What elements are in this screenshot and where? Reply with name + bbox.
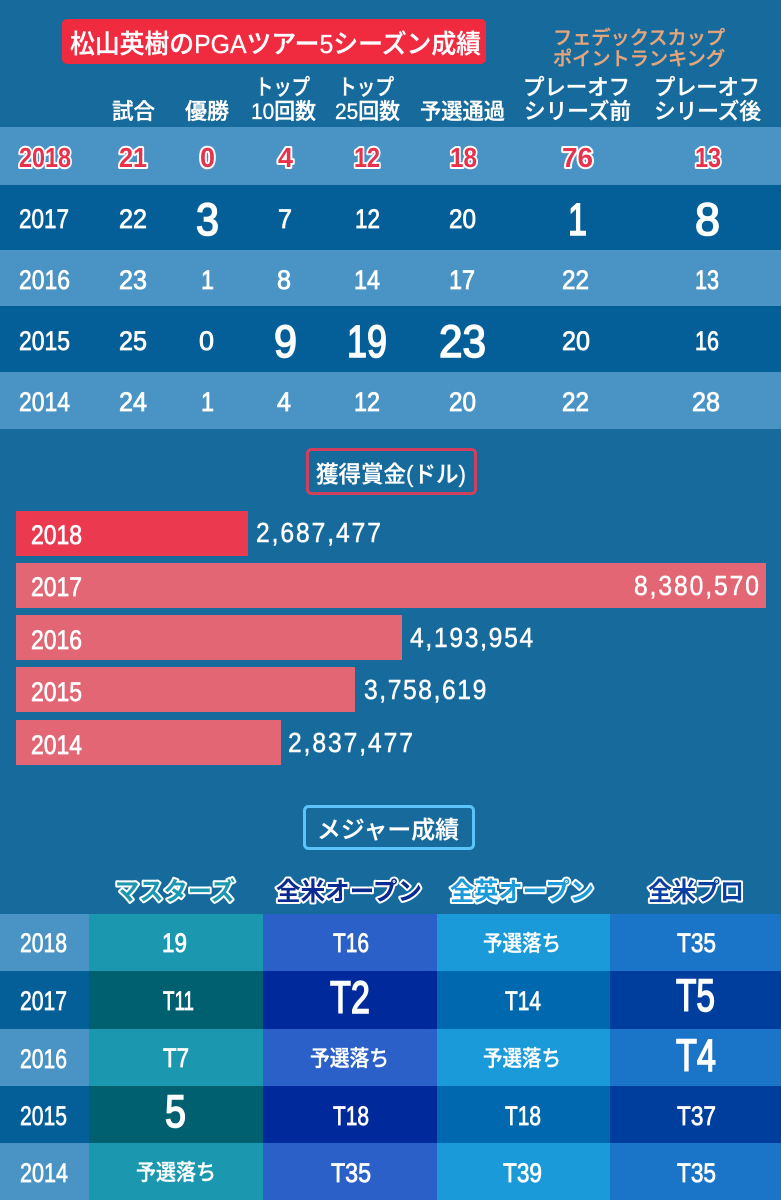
majors row 2014: 2014	[20, 1158, 68, 1188]
season table column headers: トップ	[338, 75, 394, 100]
season table column headers: 試合	[112, 99, 155, 124]
heading: prize money: 獲得賞金(ドル)	[316, 461, 466, 487]
season row 2017: 2017	[19, 204, 69, 234]
season table column headers: トップ	[255, 75, 310, 100]
season row 2015: 20	[562, 326, 590, 356]
season row 2014: 24	[119, 387, 147, 417]
majors row 2014: T35	[331, 1158, 371, 1188]
season row 2017: 20	[449, 204, 476, 234]
season table column headers	[112, 75, 761, 124]
bar 2015: 2015	[31, 677, 82, 707]
season row 2016	[0, 250, 781, 306]
season row 2015: 2015	[19, 326, 70, 356]
majors row 2014	[0, 1143, 781, 1200]
season row 2018: 12	[354, 142, 380, 173]
majors row 2016: 2016	[20, 1044, 67, 1074]
majors row 2017: T14	[505, 986, 541, 1016]
heading: majors: メジャー成績	[317, 817, 459, 844]
season row 2016: 2016	[19, 265, 70, 295]
majors row 2015: 2015	[20, 1101, 67, 1131]
season row 2014: 2014	[19, 387, 70, 417]
majors row 2016: T7	[163, 1043, 189, 1073]
season row 2014: 1	[201, 387, 214, 417]
season table column headers: シリーズ前	[524, 99, 631, 124]
season row 2016: 23	[119, 265, 147, 295]
heading: FedEx Cup ranking: ポイントランキング	[553, 48, 725, 70]
majors row 2016: 予選落ち	[483, 1046, 561, 1071]
bar 2016: 4,193,954	[410, 622, 533, 653]
season row 2018: 76	[562, 142, 593, 173]
majors row 2016	[0, 1029, 781, 1086]
season row 2016: 13	[695, 265, 719, 295]
heading: FedEx Cup ranking: フェデックスカップ	[553, 26, 725, 49]
season row 2018: 18	[450, 142, 477, 173]
majors row 2018: 19	[162, 928, 187, 958]
season row 2014: 20	[449, 387, 476, 417]
season row 2014: 28	[692, 387, 720, 417]
season row 2014	[0, 372, 781, 429]
bar 2018	[16, 511, 381, 556]
majors row 2018: T35	[677, 928, 716, 958]
majors row 2015: T18	[505, 1101, 541, 1131]
season row 2018: 13	[695, 142, 721, 173]
majors row 2018	[0, 914, 781, 971]
season row 2014: 12	[354, 387, 380, 417]
majors row 2017: T5	[676, 970, 715, 1021]
season table column headers: 予選通過	[420, 99, 505, 124]
heading: prize money	[308, 450, 476, 494]
majors row 2014: T35	[677, 1158, 716, 1188]
season row 2015: 23	[439, 316, 486, 367]
majors column headers: 全英オープン	[450, 878, 594, 906]
season row 2018: 4	[278, 142, 293, 173]
bar 2016: 2016	[31, 625, 82, 655]
majors row 2015: T37	[677, 1101, 716, 1131]
season row 2016: 22	[562, 265, 589, 295]
season row 2014: 4	[277, 387, 291, 417]
bar 2014: 2014	[31, 730, 82, 760]
heading: majors	[304, 806, 474, 848]
season table column headers: 優勝	[185, 99, 229, 124]
season row 2015: 25	[119, 326, 147, 356]
majors row 2015: T18	[333, 1101, 369, 1131]
bar 2015: 3,758,619	[364, 674, 486, 705]
season row 2015: 9	[274, 316, 297, 367]
majors column headers: マスターズ	[115, 877, 235, 906]
bar 2018: 2018	[31, 520, 82, 550]
bar 2017	[16, 563, 766, 608]
season row 2015: 19	[347, 316, 387, 367]
majors column headers: 全米プロ	[648, 878, 744, 906]
bar 2016	[16, 615, 533, 660]
majors row 2017: T11	[163, 986, 194, 1016]
majors column headers: 全米オープン	[276, 878, 422, 906]
prize money bar chart	[16, 511, 766, 765]
majors row 2018: 予選落ち	[483, 931, 561, 956]
majors row 2017: 2017	[20, 986, 67, 1016]
season table column headers: プレーオフ	[523, 75, 630, 100]
majors row 2014: T39	[503, 1158, 542, 1188]
majors row 2018: 2018	[20, 928, 67, 958]
season table column headers: 10回数	[251, 99, 316, 124]
majors column headers	[115, 877, 744, 906]
majors row 2016: 予選落ち	[310, 1046, 389, 1071]
season row 2016: 8	[277, 265, 291, 295]
bar 2018: 2,687,477	[256, 517, 381, 548]
season row 2017	[0, 185, 781, 250]
season table column headers: シリーズ後	[654, 99, 761, 124]
season row 2017: 7	[278, 204, 292, 234]
bar 2017: 8,380,570	[634, 570, 759, 601]
season row 2017: 8	[695, 194, 720, 245]
season row 2018: 21	[119, 142, 147, 173]
season row 2015: 0	[199, 326, 214, 356]
majors row 2017: T2	[330, 972, 370, 1023]
title	[62, 19, 486, 64]
season row 2016: 14	[354, 265, 380, 295]
bar 2015	[16, 667, 486, 712]
majors row 2016: T4	[676, 1030, 716, 1081]
bar 2014	[16, 720, 413, 765]
bar 2017: 2017	[31, 572, 82, 602]
season row 2015: 16	[695, 326, 719, 356]
season table column headers: プレーオフ	[654, 75, 760, 100]
season row 2017: 22	[119, 204, 147, 234]
season row 2018: 2018	[19, 142, 71, 173]
title: 松山英樹のPGAツアー5シーズン成績	[70, 29, 481, 59]
season row 2017: 12	[355, 204, 380, 234]
season row 2018: 0	[200, 142, 215, 173]
heading: FedEx Cup ranking	[553, 26, 725, 70]
majors row 2015: 5	[165, 1086, 186, 1137]
majors row 2015	[0, 1086, 781, 1143]
majors row 2017	[0, 970, 781, 1029]
majors row 2014: 予選落ち	[136, 1160, 216, 1185]
majors row 2018: T16	[333, 928, 369, 958]
season row 2017: 1	[568, 194, 587, 245]
season row 2018	[0, 127, 781, 185]
season row 2014: 22	[562, 387, 589, 417]
season row 2016: 1	[201, 265, 214, 295]
season row 2016: 17	[449, 265, 475, 295]
bar 2014: 2,837,477	[288, 727, 413, 758]
season table column headers: 25回数	[335, 99, 400, 124]
season row 2015	[0, 306, 781, 372]
season row 2017: 3	[196, 194, 219, 245]
